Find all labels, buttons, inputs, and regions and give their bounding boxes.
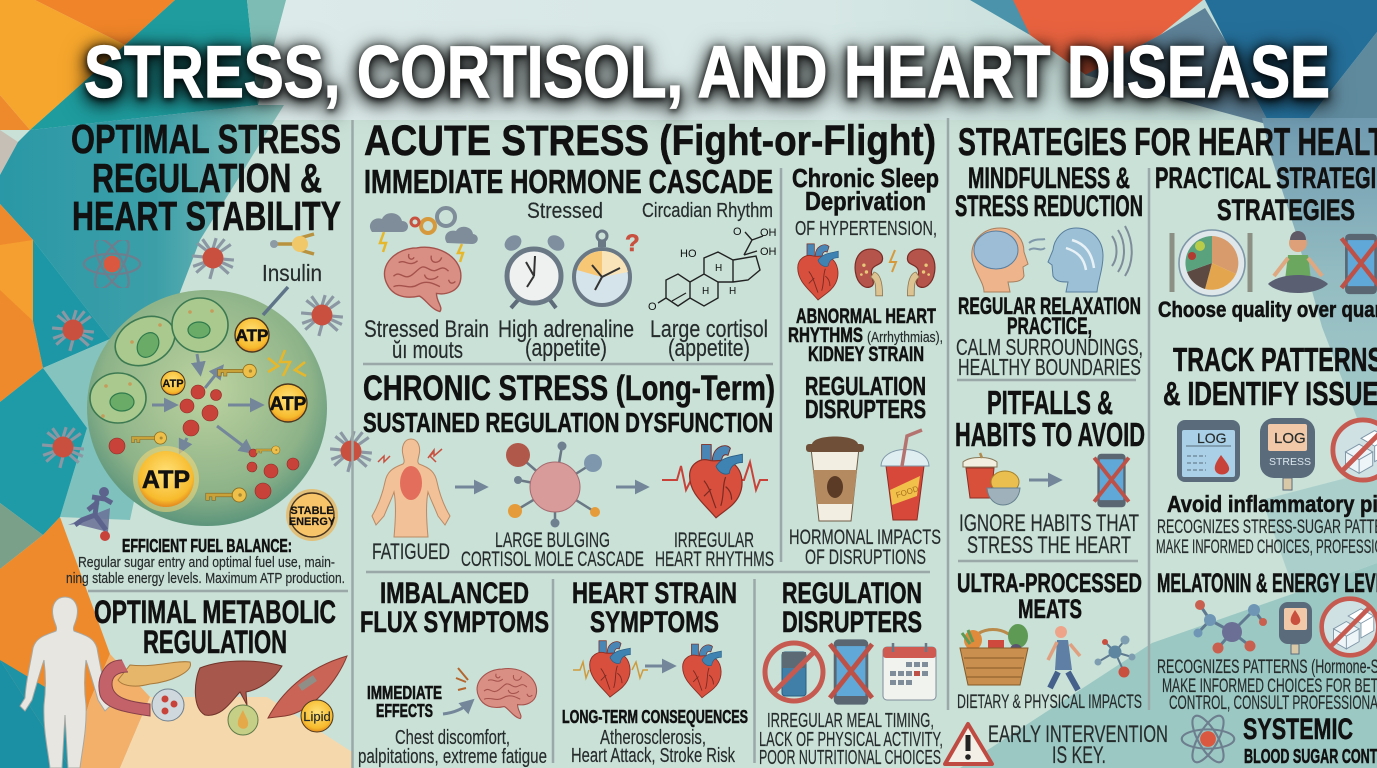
icon: log stress meter: LOG (1274, 430, 1306, 447)
icon: calendar (883, 643, 936, 700)
arrow (1029, 478, 1058, 482)
text block: efficient fuel balance: EFFICIENT FUEL BALANCE: (122, 536, 292, 556)
icon: heart (798, 244, 838, 300)
icon: coffee cup (806, 436, 864, 521)
icon: cortisol steroid structure: O (648, 301, 657, 313)
callout: early intervention: EARLY INTERVENTION (988, 721, 1168, 748)
icon: human body silhouette (20, 597, 110, 768)
icon: liver (195, 661, 282, 715)
subpanel: pitfalls: HABITS TO AVOID (955, 416, 1145, 453)
heading: optimal stress regulation: OPTIMAL STRESS (71, 116, 341, 162)
icon: blood cells circle (152, 689, 184, 721)
icon: healthy heart (590, 641, 630, 697)
icon: cortisol steroid structure: H (729, 286, 736, 297)
caption: stressed brain: Stressed Brain (364, 316, 489, 343)
caption: high adrenaline: High adrenaline (498, 316, 634, 343)
icon: phone crossed (830, 639, 872, 705)
icon: sound waves (1029, 239, 1045, 250)
subpanel: mindfulness: HEALTHY BOUNDARIES (958, 354, 1141, 380)
badge: ATP large (133, 446, 199, 512)
label: stressed: Stressed (527, 198, 603, 223)
subpanel: chronic sleep deprivation: Deprivation (805, 186, 926, 216)
badge: ATP top (235, 318, 269, 352)
icon: molecule (1094, 636, 1136, 678)
icon: log tablet (1177, 420, 1240, 482)
badge: lipid (301, 700, 333, 732)
text block: efficient fuel balance: Regular sugar entry and optimal fuel use, main- (78, 554, 335, 571)
callout: systemic blood sugar control (1243, 713, 1377, 768)
subpanel: chronic sleep deprivation: (Arrhythmias), (867, 329, 943, 346)
icon: virus cell right (301, 295, 343, 336)
badge: ATP small: ATP (162, 378, 184, 390)
subpanel: mindfulness: CALM SURROUNDINGS, (956, 334, 1143, 360)
subpanel: heart strain symptoms: Atherosclerosis, (600, 727, 706, 749)
icon: soda and fries bowl (963, 453, 1020, 505)
heading: chronic stress: CHRONIC STRESS (Long-Term) (363, 369, 775, 408)
icon: cortisol steroid structure: OH (760, 246, 777, 258)
caption: irregular heart rhythms (655, 529, 774, 571)
subpanel: pitfalls: IGNORE HABITS THAT (959, 510, 1139, 537)
icon: insulin molecule (270, 234, 314, 254)
subpanel: practical strategies (1155, 162, 1377, 714)
subpanel: imbalanced flux symptoms: IMBALANCED (380, 577, 529, 610)
icon: no sugar (1333, 420, 1377, 480)
heading: optimal metabolic regulation: OPTIMAL METABOLIC (94, 594, 336, 630)
icon: heart with ECG (662, 445, 768, 518)
icon: no energy drink (765, 643, 823, 701)
subpanel: heart strain symptoms: SYMPTOMS (590, 606, 719, 639)
icon: soda cup: FOOD (895, 484, 920, 500)
subpanel: ultra-processed meats: DIETARY & PHYSICAL IMPACTS (957, 692, 1142, 713)
text block: efficient fuel balance (66, 536, 345, 587)
subpanel: imbalanced flux symptoms: palpitations, extreme fatigue (358, 746, 547, 768)
callout: early intervention (988, 721, 1168, 768)
subpanel: mindfulness: MINDFULNESS & (968, 162, 1130, 195)
icon: virus cell right edge (330, 431, 372, 472)
heading: optimal metabolic regulation (94, 594, 336, 660)
text block: efficient fuel balance: ning stable energy levels. Maximum ATP production. (66, 570, 345, 587)
subpanel: pitfalls: PITFALLS & (987, 384, 1113, 421)
icon: cortisol molecule cascade (506, 442, 602, 528)
subpanel: chronic sleep deprivation: RHYTHMS (788, 324, 863, 347)
icon: muscle (268, 656, 347, 718)
subpanel: chronic sleep deprivation: Chronic Sleep (792, 163, 939, 193)
subpanel: pitfalls: STRESS THE HEART (967, 532, 1131, 559)
icon: glucose meter (1279, 602, 1312, 654)
icon: stopwatch (574, 231, 630, 305)
icon: phone crossed (1342, 234, 1377, 294)
icon: head with brain (972, 228, 1028, 292)
subpanel: regulation disrupters drinks: HORMONAL IMPACTS (789, 526, 941, 549)
icon: fatigued body (372, 439, 450, 537)
subpanel: regulation disrupters drinks: OF DISRUPTIONS (805, 546, 926, 569)
subpanel: regulation disrupters habits: DISRUPTERS (782, 606, 922, 639)
badge: stable energy: STABLE (290, 505, 334, 517)
icon: strained heart (683, 644, 721, 698)
heading: optimal stress regulation (71, 116, 341, 239)
icon: log stress meter: STRESS (1269, 456, 1311, 468)
subpanel: imbalanced flux symptoms: FLUX SYMPTOMS (360, 606, 549, 639)
caption: large bulging cortisol mole cascade: CORTISOL MOLE CASCADE (461, 548, 644, 571)
subpanel: regulation disrupters habits: IRREGULAR MEAL TIMING, (767, 710, 934, 732)
icon: virus cell lower left (42, 427, 84, 468)
icon: atom (1182, 711, 1234, 767)
label: circadian rhythm: Circadian Rhythm (642, 200, 773, 222)
icon: right kidney (907, 249, 935, 296)
icon: alarm clock (502, 232, 567, 308)
icon: question mark: ? (625, 230, 640, 257)
caption: irregular heart rhythms: IRREGULAR (674, 529, 754, 552)
subpanel: ultra-processed meats: MEATS (1018, 594, 1082, 624)
label: insulin: Insulin (262, 260, 322, 286)
subpanel: regulation disrupters drinks: REGULATION (805, 371, 926, 401)
icon: cortisol steroid structure: H (702, 286, 709, 297)
icon: waves right (1112, 226, 1132, 276)
icon: soda cup (881, 430, 929, 520)
icon: plate with fork and knife (1172, 230, 1250, 296)
heading: optimal stress regulation: HEART STABILITY (72, 193, 341, 239)
icon: virus cell top (192, 238, 234, 279)
panel: strategies for heart health (945, 121, 1377, 768)
subpanel: heart strain symptoms: Heart Attack, Stroke Risk (571, 745, 736, 767)
subpanel: chronic sleep deprivation: OF HYPERTENSION, (795, 218, 937, 240)
subpanel: mindfulness: REGULAR RELAXATION (958, 293, 1141, 320)
icon: log tablet: LOG (1197, 430, 1227, 446)
caption: large cortisol (650, 316, 768, 362)
icon: phone crossed (1094, 454, 1129, 507)
icon: stressed brain with storm (370, 208, 478, 312)
subpanel: heart strain symptoms: HEART STRAIN (572, 577, 737, 610)
subpanel: chronic sleep deprivation: ABNORMAL HEART (796, 305, 936, 328)
icon: cortisol steroid structure (648, 226, 777, 313)
icon: cortisol steroid structure: OH (760, 227, 777, 239)
badge: lipid: Lipid (303, 709, 331, 724)
caption: large cortisol: (appetite) (668, 335, 750, 362)
diagram: cell metabolism circle (87, 287, 327, 526)
subpanel: imbalanced flux symptoms: Chest discomfort, (395, 727, 510, 749)
arrow (645, 664, 672, 668)
badge: ATP right (269, 384, 307, 422)
icon: walking person (1048, 626, 1080, 690)
icon: log stress meter (1260, 418, 1315, 490)
heading: optimal stress regulation: REGULATION & (92, 155, 322, 201)
heading: immediate hormone cascade: IMMEDIATE HORMONE CASCADE (364, 163, 773, 200)
caption: large bulging cortisol mole cascade (461, 529, 644, 571)
panel: optimal stress regulation (20, 116, 372, 768)
icon: left kidney (855, 249, 883, 296)
subpanel: mindfulness: PRACTICE, (1007, 313, 1092, 340)
subpanel: pitfalls (955, 384, 1145, 559)
subpanel: regulation disrupters habits (759, 577, 943, 768)
subpanel: imbalanced flux symptoms: IMMEDIATE (367, 683, 442, 703)
caption: stressed brain (364, 316, 489, 364)
subpanel: regulation disrupters drinks: DISRUPTERS (805, 394, 926, 424)
badge: stable energy (286, 489, 338, 541)
subpanel: regulation disrupters habits: REGULATION (782, 577, 922, 610)
caption: large cortisol: Large cortisol (650, 316, 768, 343)
subpanel: imbalanced flux symptoms (358, 577, 549, 768)
icon: fat droplet (228, 705, 258, 735)
heading: sustained regulation dysfunction: SUSTAINED REGULATION DYSFUNCTION (363, 407, 773, 438)
icon: runner (68, 487, 112, 541)
icon: cortisol steroid structure: HO (680, 248, 697, 260)
panel: acute stress (358, 117, 943, 768)
badge: stable energy: ENERGY (289, 516, 336, 528)
subpanel: chronic sleep deprivation (788, 163, 943, 366)
icon: food basket (960, 624, 1028, 685)
subpanel: heart strain symptoms: LONG-TERM CONSEQUENCES (562, 707, 748, 727)
caption: high adrenaline: (appetite) (525, 335, 607, 362)
icon: cortisol steroid structure: H (715, 263, 722, 274)
icon: calm head (1048, 228, 1103, 292)
subpanel: regulation disrupters drinks (789, 371, 941, 569)
badge: ATP small (161, 371, 185, 395)
subpanel: chronic sleep deprivation: KIDNEY STRAIN (808, 343, 924, 366)
arrow (616, 486, 645, 488)
icon: meditating person (1268, 231, 1328, 293)
subpanel: mindfulness: STRESS REDUCTION (955, 190, 1143, 223)
caption: stressed brain: ŭı mouts (392, 337, 463, 364)
icon: molecule network (1194, 600, 1267, 654)
caption: high adrenaline (498, 316, 634, 362)
icon: warning triangle (945, 724, 992, 764)
subpanel: heart strain symptoms (562, 577, 748, 767)
subpanel: ultra-processed meats (957, 568, 1142, 713)
badge: ATP top: ATP (236, 326, 268, 345)
arrow (443, 702, 471, 714)
icon: brain with lightning (477, 668, 537, 719)
icon: atom (84, 234, 140, 294)
subpanel: ultra-processed meats: ULTRA-PROCESSED (957, 568, 1142, 598)
icon: cortisol steroid structure: O (733, 226, 742, 238)
icon: virus cell left (52, 310, 94, 351)
caption: irregular heart rhythms: HEART RHYTHMS (655, 548, 774, 571)
badge: ATP right: ATP (270, 394, 307, 415)
subpanel: mindfulness (955, 162, 1143, 380)
icon: pancreas (99, 660, 190, 716)
subpanel: regulation disrupters habits: LACK OF PHYSICAL ACTIVITY, (759, 729, 943, 751)
heading: optimal metabolic regulation: REGULATION (143, 624, 287, 660)
arrow (455, 486, 484, 488)
heading: acute stress: ACUTE STRESS (Fight-or-Flight) (364, 117, 936, 165)
icon: no sugar (1322, 599, 1377, 655)
subpanel: imbalanced flux symptoms: EFFECTS (376, 701, 433, 721)
caption: fatigued: FATIGUED (372, 539, 450, 564)
badge: ATP large: ATP (142, 466, 190, 494)
caption: large bulging cortisol mole cascade: LARGE BULGING (495, 529, 610, 552)
